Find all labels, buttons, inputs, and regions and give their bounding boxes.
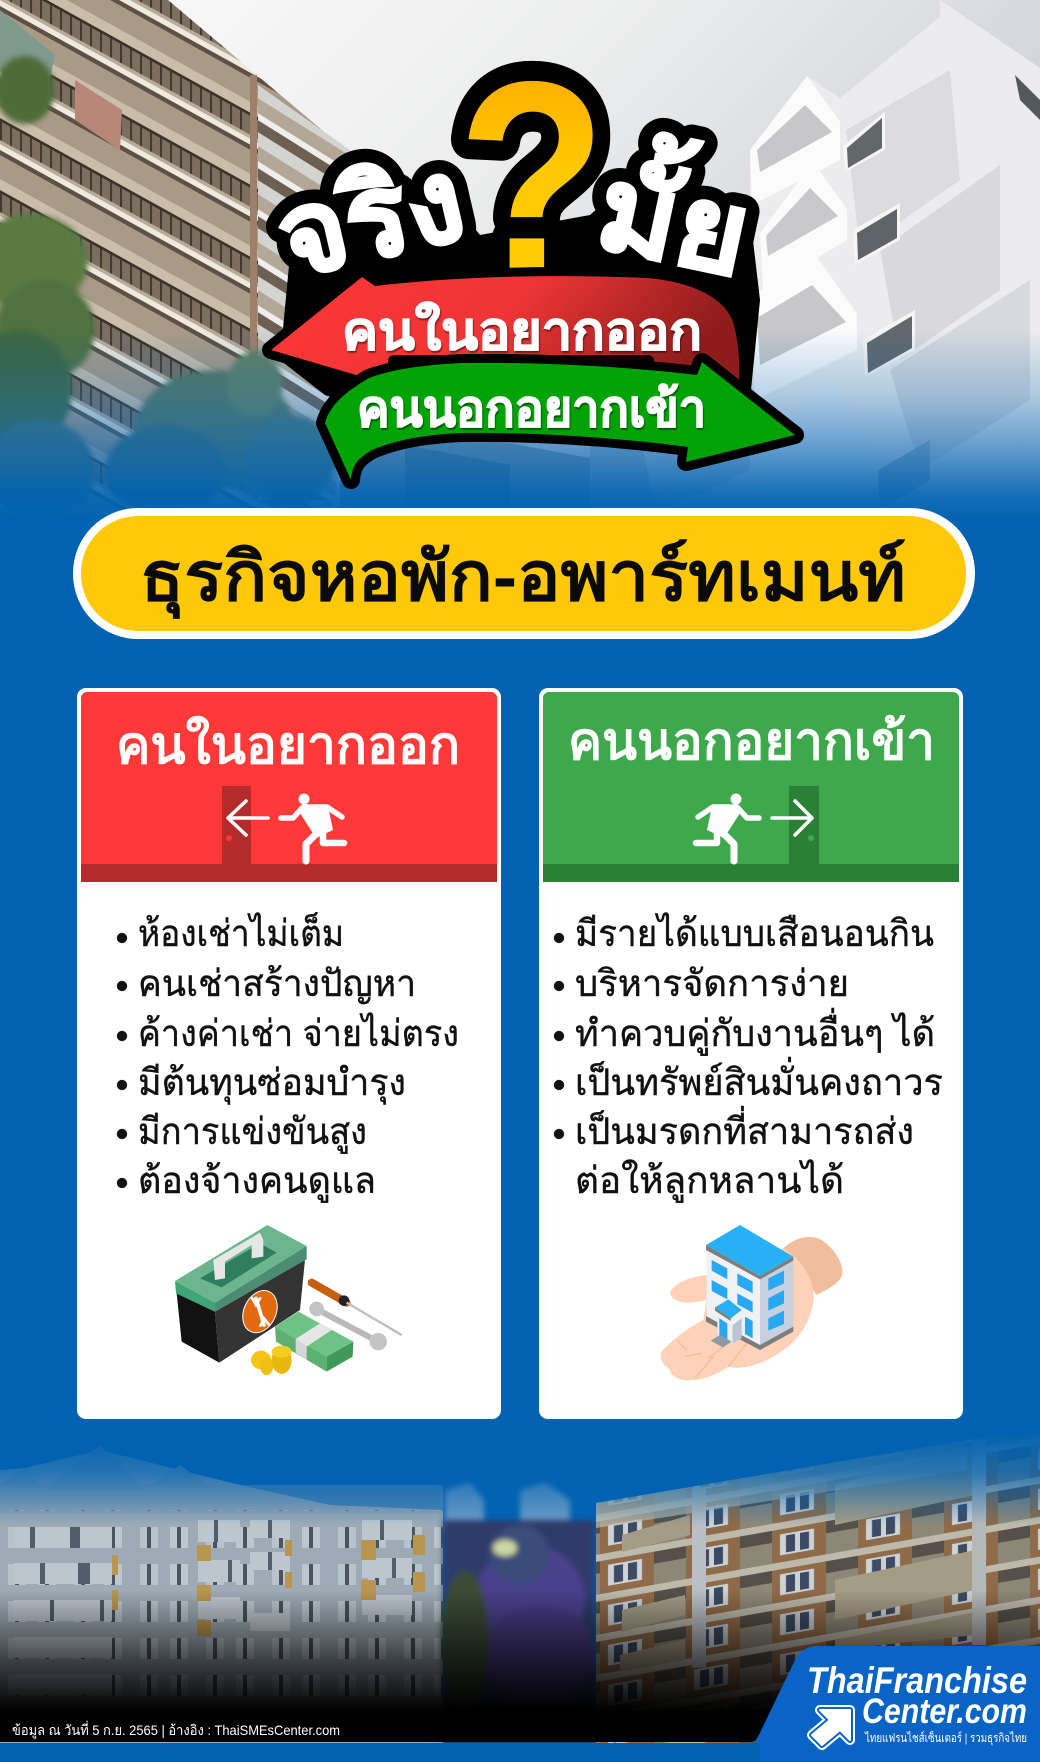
bottom photo: apartment buildings xyxy=(0,1430,1040,1745)
list: problems: ต้องจ้างคนดูแล xyxy=(138,1160,376,1203)
balcony 4 xyxy=(750,375,870,520)
icon: building on open hand xyxy=(661,1225,842,1380)
title pill xyxy=(73,508,975,639)
icon: person running to entrance xyxy=(696,794,812,861)
left apartment building xyxy=(0,0,352,520)
list: benefits: ทำควบคู่กับงานอื่นๆ ได้ xyxy=(575,1007,935,1056)
black backing between letters xyxy=(280,170,760,420)
question mark: ? xyxy=(457,24,607,334)
icon: toolbox, tools and money xyxy=(175,1225,402,1375)
right white building xyxy=(640,0,1040,522)
list: problems xyxy=(117,910,459,1203)
caption bar xyxy=(0,1712,775,1742)
list: benefits: บริหารจัดการง่าย xyxy=(575,963,849,1004)
header text: คนในอยากออก xyxy=(116,715,460,775)
balcony 3 xyxy=(750,257,857,400)
windows xyxy=(843,112,885,172)
word: จริง: จริง xyxy=(265,134,476,302)
balcony 1 xyxy=(750,76,840,205)
red arrow xyxy=(271,276,739,387)
list: problems: ห้องเช่าไม่เต็ม xyxy=(138,910,344,954)
green arrow xyxy=(325,362,795,480)
question mark: ? xyxy=(457,24,607,334)
right long building xyxy=(596,1430,1040,1745)
icon: person running to exit xyxy=(228,794,344,861)
list: problems: มีต้นทุนซ่อมบำรุง xyxy=(138,1062,406,1105)
word: มั้ย: มั้ย xyxy=(587,123,765,301)
title text: ธุรกิจหอพัก-อพาร์ทเมนท์ xyxy=(140,539,906,619)
hero fade to blue xyxy=(0,330,1040,522)
brand logo: ThaiFranchise Center.com xyxy=(0,1646,1040,1762)
list: problems: มีการแข่งขันสูง xyxy=(138,1111,367,1154)
word: มั้ย: มั้ย xyxy=(587,123,765,301)
fade from blue at top xyxy=(0,1430,1040,1525)
list: problems: คนเช่าสร้างปัญหา xyxy=(138,963,416,1005)
fade to black at bottom xyxy=(0,1590,1040,1712)
panel: คนนอกอยากเข้า xyxy=(539,688,963,1419)
word: จริง: จริง xyxy=(265,134,476,302)
green arrow label: คนนอกอยากเข้า xyxy=(357,381,706,437)
headline sign: จริง ? มั้ย xyxy=(265,24,795,480)
red arrow label: คนในอยากออก xyxy=(342,301,702,361)
list: problems: ค้างค่าเช่า จ่ายไม่ตรง xyxy=(138,1012,459,1054)
left tower xyxy=(0,1445,443,1745)
hero photo: sky and apartment buildings xyxy=(0,0,1040,522)
list: benefits: มีรายได้แบบเสือนอนกิน xyxy=(575,912,934,954)
list: benefits xyxy=(554,912,943,1203)
distant towers xyxy=(445,1482,570,1530)
purple trees xyxy=(441,1520,595,1745)
red header xyxy=(81,692,497,882)
list: benefits: ต่อให้ลูกหลานได้ xyxy=(575,1159,844,1203)
icon: logo arrow xyxy=(812,1710,850,1745)
trees xyxy=(0,56,554,520)
black strip xyxy=(388,355,654,371)
source note: ข้อมูล ณ วันที่ 5 ก.ย. 2565 | อ้างอิง : ThaiSMEsCenter.com xyxy=(12,1721,340,1739)
header text: คนนอกอยากเข้า xyxy=(568,713,935,771)
panel: คนในอยากออก xyxy=(77,688,501,1419)
list: benefits: เป็นทรัพย์สินมั่นคงถาวร xyxy=(575,1056,943,1103)
lower middle building xyxy=(340,430,660,522)
green header xyxy=(543,692,959,882)
list: benefits: เป็นมรดกที่สามารถส่ง xyxy=(575,1105,914,1152)
balcony 2 xyxy=(760,162,847,290)
